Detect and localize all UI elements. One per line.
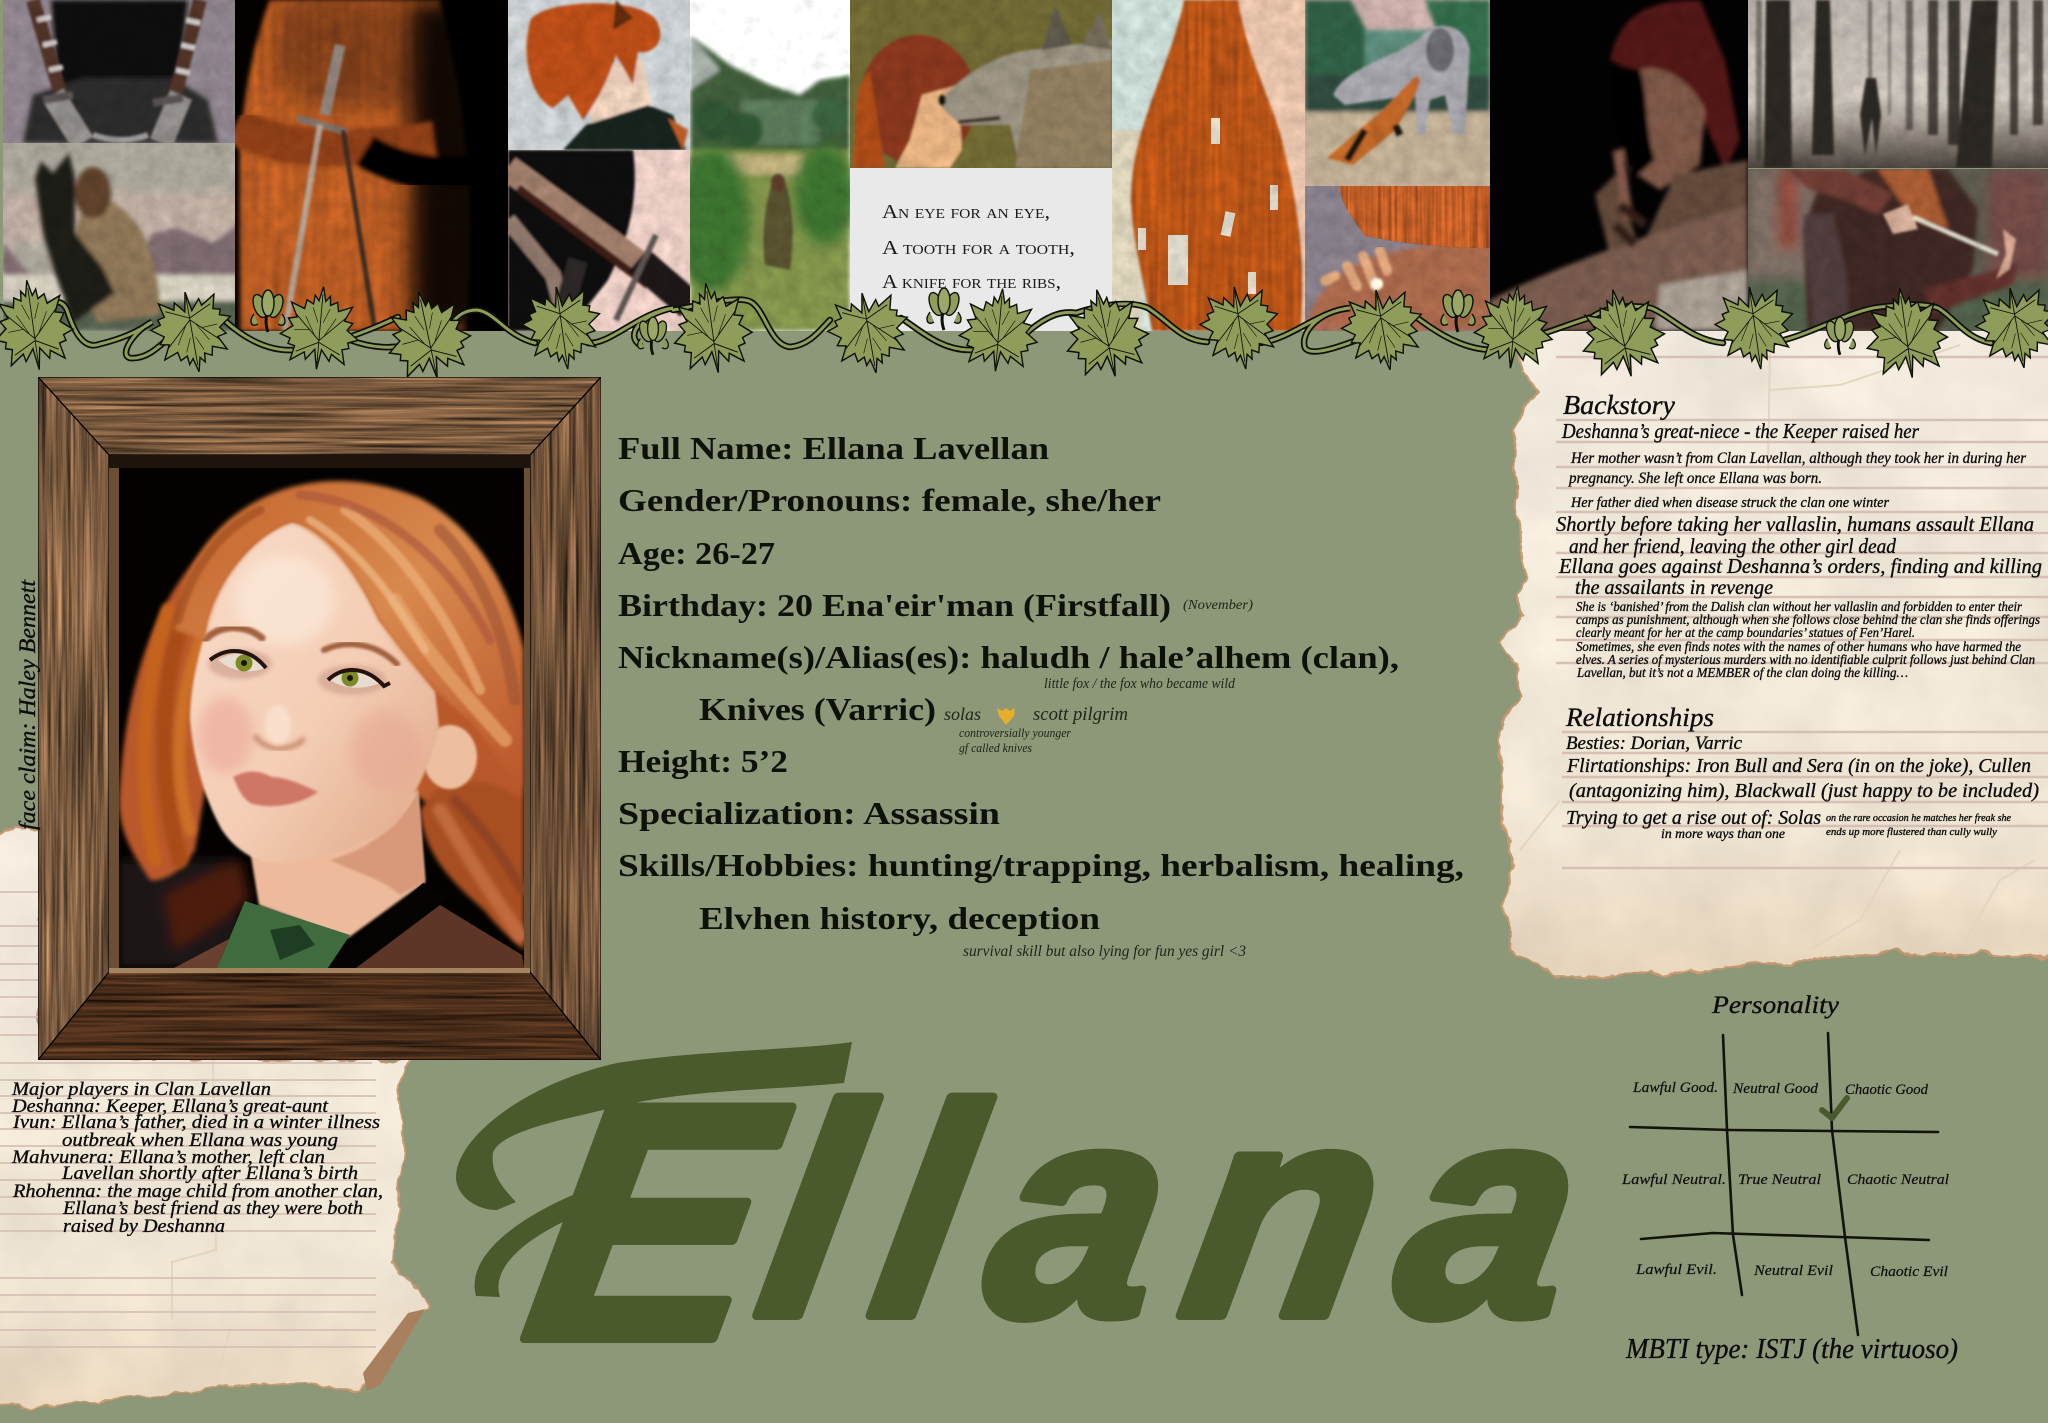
relationships text: ends up more flustered than cully wully [1826,826,1997,838]
alignment labels: Neutral Good [1732,1081,1819,1097]
alignment labels: Lawful Evil. [1635,1262,1717,1278]
relationships text [1565,703,2039,842]
photo collage [3,0,2048,331]
hair front [175,481,524,790]
backstory text: the assailants in revenge [1575,575,1773,599]
side notes on details: gf called knives [959,740,1032,755]
alignment labels: Lawful Good. [1632,1080,1718,1096]
backstory text: Lavellan, but it’s not a MEMBER of the clan doing the killing… [1576,666,1908,681]
photo: wolf embrace painting [3,143,235,331]
relationships text: Trying to get a rise out of: Solas [1566,807,1821,829]
nose [255,735,304,748]
panel: quote card: A tooth for a tooth, [882,237,1075,259]
panel: quote card: An eye for an eye, [882,201,1050,223]
backstory text: Ellana goes against Deshanna’s orders, finding and killing [1558,554,2042,578]
side notes on details [944,598,1253,960]
frame: wood [38,377,601,1060]
clan text [11,1079,383,1237]
chart grid [1630,1033,1938,1335]
photo: woman with knife [1748,169,2048,331]
character details [618,430,1464,936]
check mark [1822,1098,1847,1118]
relationships text: on the rare occasion he matches her freak she [1826,812,2011,824]
backstory text: Shortly before taking her vallaslin, humans assault Ellana [1556,512,2034,536]
alignment labels: Chaotic Good [1845,1082,1928,1098]
alignment labels: True Neutral [1738,1172,1821,1188]
character details: Specialization: Assassin [618,795,1000,831]
alignment labels: Chaotic Evil [1870,1264,1948,1280]
backstory text: Sometimes, she even finds notes with the names of other humans who have harmed the [1576,640,2021,655]
character details: Skills/Hobbies: hunting/trapping, herbalism, healing, [618,847,1464,883]
side notes on details: survival skill but also lying for fun yes girl <3 [963,943,1246,960]
clan text: outbreak when Ellana was young [62,1130,338,1151]
photo: messy red bun from behind [508,0,690,150]
photo: shoulder and copper hair [1305,186,1490,331]
face [190,522,439,863]
photo: cloaked figure in meadow [690,0,850,331]
side notes on details: (November) [1183,598,1253,613]
backstory text: Her mother wasn’t from Clan Lavellan, although they took her in during her [1570,450,2027,467]
clan text: Deshanna: Keeper, Ellana’s great-aunt [11,1096,329,1117]
alignment labels: Lawful Neutral. [1621,1172,1726,1188]
backstory text [1556,390,2042,681]
clan text: Lavellan shortly after Ellana’s birth [61,1163,358,1184]
eyes [208,649,272,679]
portrait in wooden frame [38,377,601,1060]
side notes on details: little fox / the fox who became wild [1044,676,1235,692]
backstory text: Deshanna’s great-niece - the Keeper raised her [1561,419,1920,443]
side notes on details: controversially younger [959,725,1072,740]
character details: Height: 5’2 [618,743,788,779]
ear [423,725,477,789]
alignment labels: Neutral Evil [1753,1263,1833,1279]
relationships text: (antagonizing him), Blackwall (just happy to be included) [1569,780,2039,802]
character details: Birthday: 20 Ena'eir'man (Firstfall) [618,587,1171,623]
relationships text: Flirtationships: Iron Bull and Sera (in on the joke), Cullen [1566,755,2031,777]
relationships text: Besties: Dorian, Varric [1566,733,1743,754]
face claim label: face claim: Haley Bennett [15,579,40,830]
personality heading: Personality [1711,992,1840,1019]
photo: elf and wolf painting [850,0,1112,168]
photo: braided red hair with sword [235,0,508,331]
backstory text: pregnancy. She left once Ellana was born. [1568,470,1822,487]
relationships heading: Relationships [1565,703,1714,732]
eyebrows [205,628,262,640]
photo: rusty swords [508,150,690,331]
alignment labels: Chaotic Neutral [1847,1172,1949,1188]
panel: quote card [850,168,1112,331]
clothes [217,901,350,968]
alignment labels [1621,1080,1949,1280]
clan text: Rhohenna: the mage child from another clan, [12,1181,383,1202]
title: Ellana: E [506,1034,808,1409]
photo: wolf and fox [1305,0,1490,186]
personality alignment chart [1621,992,1949,1335]
side notes on details: solas [944,704,981,724]
character details: Nickname(s)/Alias(es): haludh / hale’alhem (clan), [618,639,1399,675]
character details: Full Name: Ellana Lavellan [618,430,1049,466]
icon: heart hands [997,708,1015,725]
relationships text: in more ways than one [1661,827,1785,842]
neck [250,790,425,938]
character details: Age: 26-27 [618,535,775,571]
title flourishes [456,1042,852,1297]
paper: clan note [0,826,427,1408]
backstory text: Her father died when disease struck the clan one winter [1570,495,1889,511]
paper fold [363,1309,425,1391]
clan text: Ellana’s best friend as they were both [62,1198,363,1219]
clan text: raised by Deshanna [63,1216,225,1237]
photo: silhouette in misty forest [1748,0,2048,168]
clan text: Mahvunera: Ellana’s mother, left clan [11,1147,325,1168]
character details: Gender/Pronouns: female, she/her [618,482,1161,518]
side notes on details: scott pilgrim [1033,704,1128,725]
photo: long braided hair with beads [1112,0,1305,331]
paper: backstory note [1500,325,2048,976]
character details: Knives (Varric) [699,691,936,727]
backstory text: and her friend, leaving the other girl dead [1569,534,1896,558]
photo: sheathed daggers on back [3,0,235,143]
clan text: Major players in Clan Lavellan [11,1079,271,1100]
vine stem [25,300,1991,358]
backstory heading: Backstory [1563,390,1675,420]
title: Ellana: llana [741,1044,1634,1380]
panel: quote card: A knife for the ribs, [882,271,1061,293]
hair back [119,490,524,950]
vine border [0,275,2048,387]
MBTI type: MBTI type: ISTJ (the virtuoso) [1625,1334,1958,1365]
portrait photo [119,468,524,968]
character details: Elvhen history, deception [699,900,1100,936]
backstory text: clearly meant for her at the camp boundaries’ statues of Fen’Harel. [1576,626,1915,641]
photo: woman making shush gesture [1490,0,1748,331]
title: Ellana [456,1034,1635,1409]
clan text: Ivun: Ellana’s father, died in a winter illness [12,1112,380,1133]
lips [233,772,318,806]
